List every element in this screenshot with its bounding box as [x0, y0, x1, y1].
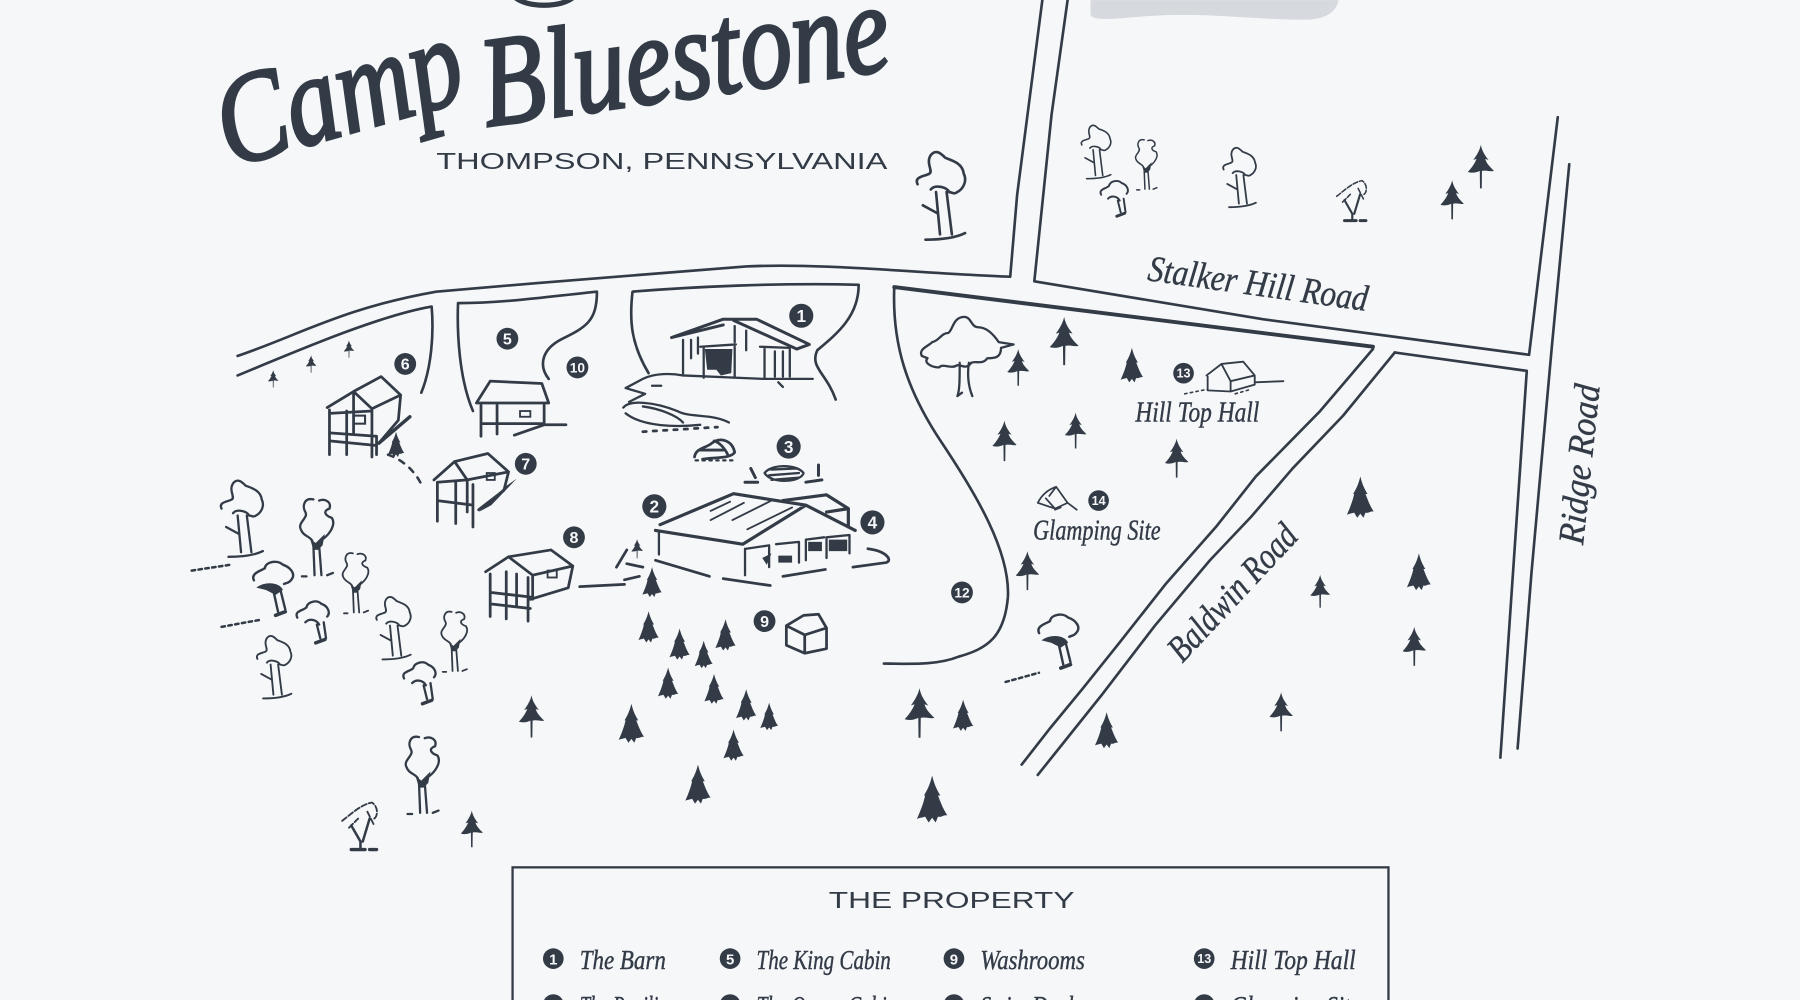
tent: Glamping Site — [1038, 487, 1077, 510]
legend row 1: 1 — [549, 951, 557, 968]
map numbers: 14 — [1092, 494, 1106, 508]
map numbers: 5 — [503, 330, 512, 348]
logo emblem fragment — [514, 0, 574, 5]
pine trees: east field — [905, 145, 1494, 822]
pine trees: central forest — [268, 340, 778, 847]
legend row 1: 13 — [1197, 952, 1211, 966]
legend row 1: Hill Top Hall — [1230, 944, 1356, 975]
legend row 2 — [543, 990, 1360, 1000]
road label: Baldwin Road: Baldwin Road — [1158, 515, 1306, 669]
ground speckles — [192, 565, 1039, 682]
map numbers: 10 — [570, 361, 585, 376]
legend row 1: The King Cabin — [757, 944, 891, 975]
fire pit — [745, 465, 822, 482]
title: Camp Bluestone — [198, 0, 898, 195]
building: The King Cabin — [476, 381, 566, 436]
building: The Pavilion and store — [580, 494, 889, 587]
rock outcrop — [623, 374, 729, 432]
legend panel — [513, 867, 1388, 1000]
road label: Stalker Hill Road: Stalker Hill Road — [1146, 247, 1371, 319]
map numbers: 1 — [796, 306, 806, 326]
map numbers: 9 — [760, 613, 769, 631]
building: Hill Top Hall — [1185, 362, 1283, 394]
map label: Glamping Site: Glamping Site — [1033, 515, 1161, 547]
road label: Ridge Road: Ridge Road — [1550, 381, 1608, 547]
deciduous trees: west grove — [221, 481, 467, 850]
subtitle: THOMPSON, PENNSYLVANIA — [436, 148, 888, 174]
building: cabin 8 — [486, 550, 573, 621]
map numbers: 7 — [521, 456, 530, 474]
deciduous trees: south and north — [917, 125, 1366, 668]
legend row 1: Washrooms — [980, 944, 1085, 975]
legend row 1: 9 — [950, 951, 958, 968]
path dashes between cabins — [388, 455, 422, 487]
building: The Barn — [672, 319, 813, 387]
big oak tree — [921, 317, 1014, 396]
bushes — [695, 440, 735, 460]
map label: Hill Top Hall: Hill Top Hall — [1135, 396, 1259, 428]
map numbers: 2 — [650, 497, 659, 517]
building: cabin 7 — [434, 454, 517, 527]
flag banner — [1091, 0, 1339, 20]
building: washrooms — [786, 614, 827, 653]
map numbers: 12 — [954, 586, 970, 601]
map numbers: 3 — [784, 437, 793, 457]
map numbers: 6 — [401, 356, 410, 374]
map numbers: 4 — [868, 513, 878, 533]
road network — [238, 0, 1569, 775]
legend row 1 — [543, 944, 1356, 975]
map numbers: 8 — [570, 529, 579, 547]
map numbers: 13 — [1177, 367, 1191, 381]
legend row 1: The Barn — [580, 944, 666, 975]
legend row 1: 5 — [726, 951, 734, 968]
map numbers — [394, 304, 1194, 632]
building: cabin 6 — [327, 377, 410, 457]
legend heading: THE PROPERTY — [829, 887, 1075, 913]
